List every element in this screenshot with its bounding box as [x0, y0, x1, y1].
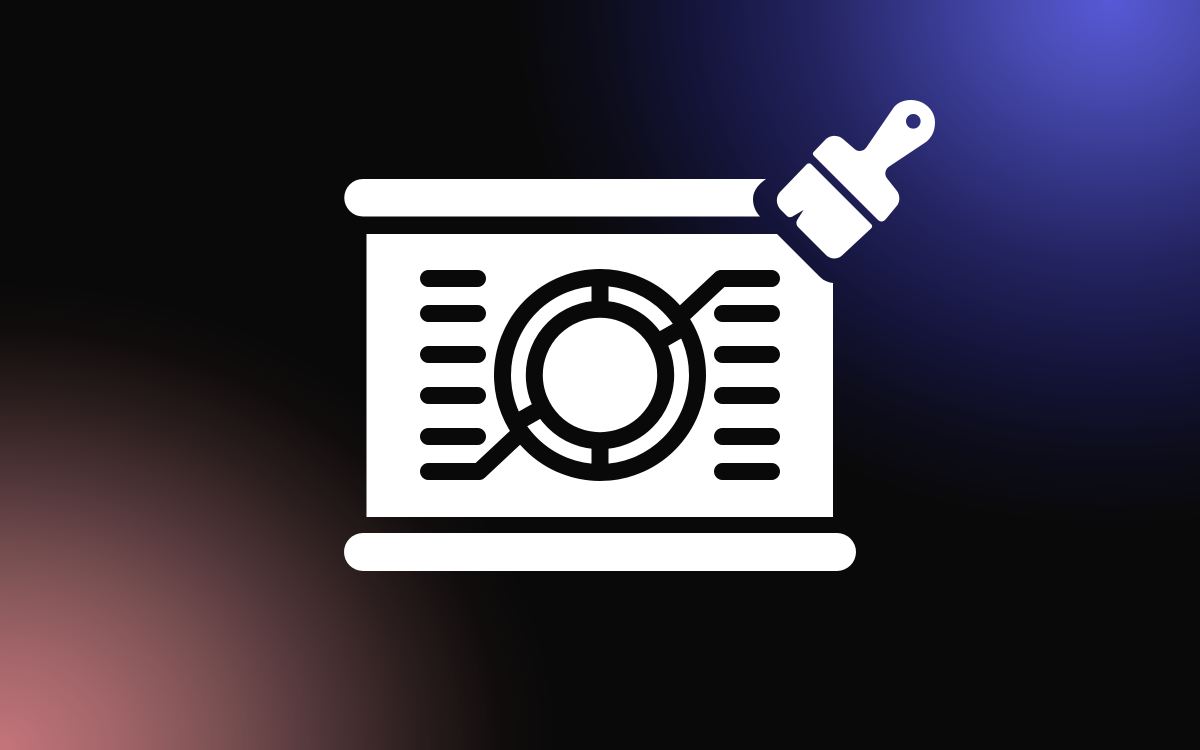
- donut chart: [502, 270, 698, 480]
- left text lines: [428, 278, 478, 436]
- bottom roller bar: [344, 533, 856, 571]
- icon: paintbrush handle: [813, 100, 935, 221]
- top roller bar: [344, 179, 766, 216]
- background: pink glow: [0, 270, 570, 750]
- leader line: lower left: [428, 435, 518, 472]
- leader line: upper right: [682, 278, 772, 315]
- icon: paintbrush bristles: [777, 163, 872, 258]
- background: blue glow: [500, 0, 1200, 540]
- icon: infographic board with paintbrush: [344, 100, 935, 571]
- board panel: [366, 234, 833, 517]
- right text lines: [722, 314, 772, 472]
